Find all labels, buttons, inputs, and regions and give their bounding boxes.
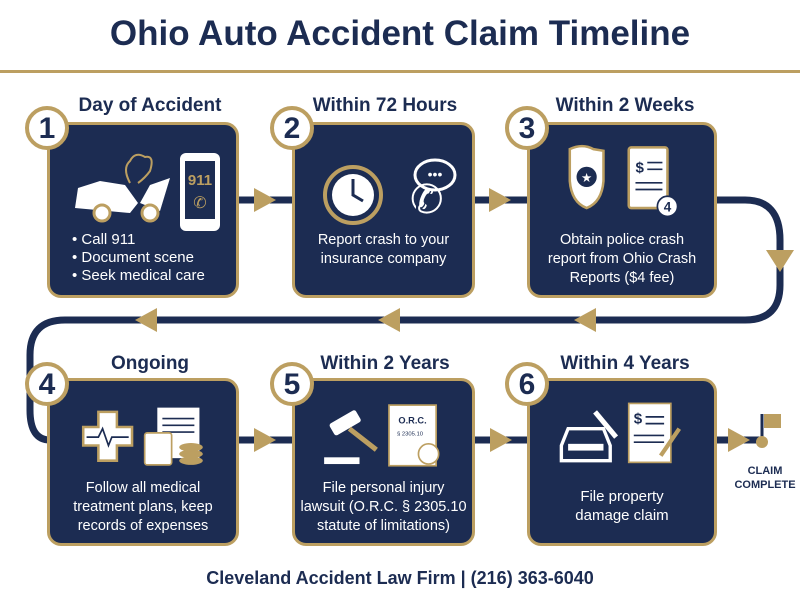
text 6: [575, 488, 669, 524]
step 3: [505, 95, 717, 298]
icons: gavel and statute: [324, 404, 440, 467]
number 2: 2: [284, 112, 300, 145]
text 1: [72, 231, 205, 284]
flag: claim complete: [734, 414, 796, 491]
number 3: [505, 106, 549, 150]
icons: clock and phone: ✆: [410, 178, 444, 222]
text 3: report from Ohio Crash: [548, 251, 696, 267]
number 5: [270, 362, 314, 406]
text 6: File property: [580, 488, 664, 505]
text 5: [300, 480, 467, 534]
text 2: [318, 232, 449, 267]
number 3: 3: [519, 112, 535, 145]
heading 4: Ongoing: [111, 353, 189, 374]
icons: gavel and statute: § 2305.10: [397, 431, 424, 437]
text 3: [548, 232, 696, 286]
number 4: [25, 362, 69, 406]
icons: badge and report: 4: [664, 199, 672, 214]
text 5: lawsuit (O.R.C. § 2305.10: [300, 499, 467, 515]
step 6: [505, 353, 717, 546]
icons: badge and report: ★: [581, 171, 592, 185]
box 5: [292, 378, 475, 546]
number 5: 5: [284, 368, 300, 401]
text 1: • Document scene: [72, 249, 194, 266]
icons: car and claim form: [560, 402, 681, 464]
icons: badge and report: $: [635, 160, 644, 177]
icons: crash and phone: ✆: [193, 195, 207, 212]
step 2: [270, 95, 475, 298]
text 5: File personal injury: [323, 480, 444, 496]
text 3: Obtain police crash: [560, 232, 684, 248]
box 1: [47, 122, 239, 298]
heading 5: Within 2 Years: [320, 353, 450, 374]
number 6: [505, 362, 549, 406]
icons: crash and phone: [75, 153, 220, 231]
box 2: [292, 122, 475, 298]
icons: badge and report: [568, 144, 677, 216]
divider: [0, 70, 800, 73]
heading 2: Within 72 Hours: [313, 95, 457, 116]
text 1: • Call 911: [72, 231, 135, 248]
text 3: Reports ($4 fee): [570, 270, 674, 286]
text 5: statute of limitations): [317, 518, 450, 534]
text 1: • Seek medical care: [72, 267, 205, 284]
step 4: [25, 353, 239, 546]
box 6: [527, 378, 717, 546]
text 4: treatment plans, keep: [73, 499, 213, 515]
footer: Cleveland Accident Law Firm | (216) 363-6040: [206, 568, 594, 588]
icons: car and claim form: $: [634, 411, 643, 428]
heading 3: Within 2 Weeks: [556, 95, 694, 116]
flag: claim complete: CLAIM: [748, 465, 782, 477]
step 1: [25, 95, 239, 298]
icons: clock and phone: •••: [428, 166, 442, 182]
box 3: [527, 122, 717, 298]
icons: clock and phone: [323, 158, 456, 225]
text 2: insurance company: [321, 251, 446, 267]
number 6: 6: [519, 368, 535, 401]
flag: claim complete: COMPLETE: [734, 479, 796, 491]
number 1: [25, 106, 69, 150]
text 4: Follow all medical: [86, 480, 200, 496]
title: Ohio Auto Accident Claim Timeline: [110, 14, 690, 53]
text 4: [73, 480, 213, 534]
number 1: 1: [39, 112, 55, 145]
step 5: [270, 353, 475, 546]
icons: gavel and statute: O.R.C.: [398, 416, 427, 426]
text 6: damage claim: [575, 507, 669, 524]
text 2: Report crash to your: [318, 232, 449, 248]
heading 6: Within 4 Years: [560, 353, 690, 374]
icons: medical and bills: [82, 408, 203, 466]
text 4: records of expenses: [78, 518, 208, 534]
number 2: [270, 106, 314, 150]
number 4: 4: [39, 368, 55, 401]
box 4: [47, 378, 239, 546]
heading 1: Day of Accident: [79, 95, 221, 116]
icons: crash and phone: 911: [188, 172, 212, 189]
